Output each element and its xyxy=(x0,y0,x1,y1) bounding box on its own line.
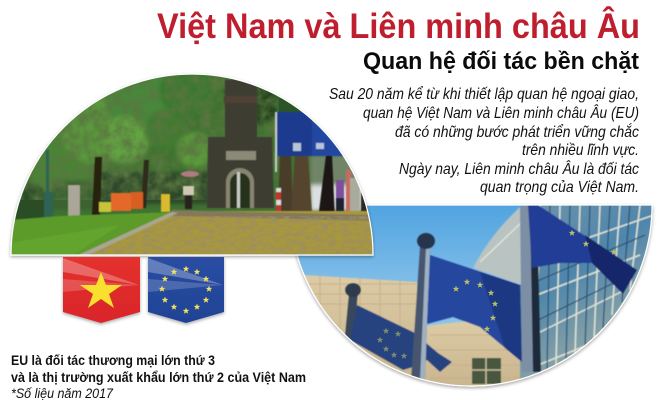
blue banner xyxy=(275,112,345,172)
fallen leaf texture xyxy=(84,216,375,257)
caption xyxy=(11,352,306,385)
photo: Hanoi gate and yellow-leaf street xyxy=(6,64,380,257)
flag stars xyxy=(377,230,617,359)
intro text: quan trọng của Việt Nam. xyxy=(480,179,639,196)
middle flag xyxy=(426,254,516,348)
icon: ring of twelve stars xyxy=(159,266,212,314)
big flag xyxy=(528,205,637,294)
flag: European Union xyxy=(148,257,224,323)
flag: Vietnam xyxy=(63,257,140,323)
icon: yellow star xyxy=(80,272,122,308)
small flag xyxy=(350,305,452,372)
caption: và là thị trường xuất khẩu lớn thứ 2 của Việt Nam xyxy=(11,369,306,385)
grass xyxy=(9,212,173,257)
caption: EU là đối tác thương mại lớn thứ 3 xyxy=(11,352,215,368)
intro text xyxy=(329,85,639,196)
subtitle: Quan hệ đối tác bền chặt xyxy=(363,48,639,75)
intro text: trên nhiều lĩnh vực. xyxy=(522,142,639,159)
foliage texture xyxy=(9,70,279,200)
yellow-leaf path xyxy=(75,211,375,257)
tower xyxy=(207,80,274,208)
photo: EU flags at the European Commission building xyxy=(288,203,654,393)
